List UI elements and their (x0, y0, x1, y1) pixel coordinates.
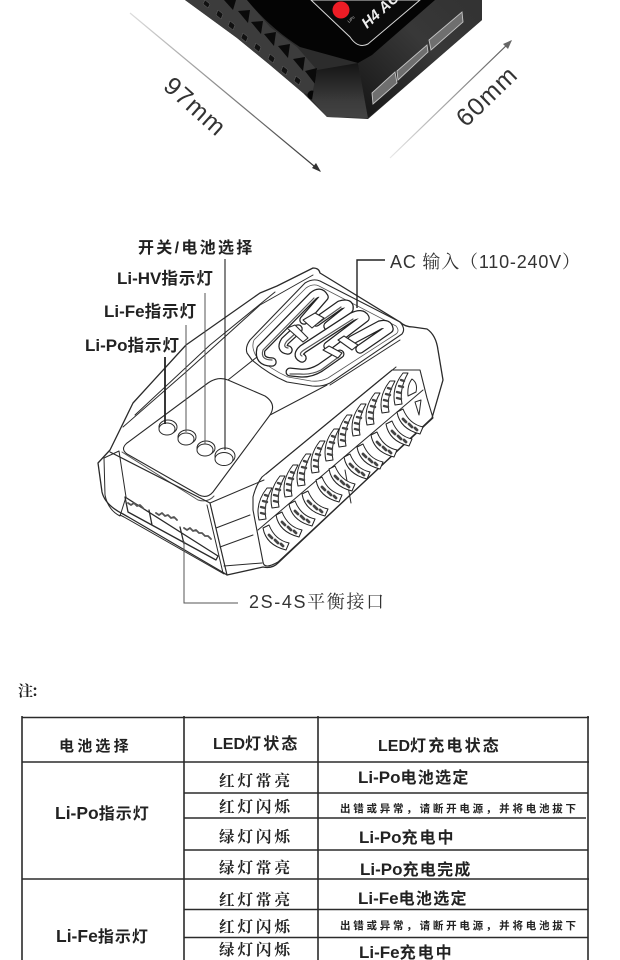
leader lines (165, 259, 385, 603)
side ports (372, 12, 463, 104)
AC slot 3 (299, 315, 365, 358)
vent panel (253, 370, 433, 566)
row group: Li-Fe (56, 889, 576, 960)
dimension: 60mm (390, 40, 523, 158)
AC panel (246, 280, 404, 386)
dimension: 97mm: 97mm (158, 72, 231, 141)
row group: Li-Fe: 出错或异常，请断开电源，并将电池拔下 (340, 919, 576, 932)
callout: Li-Po: Li-Po指示灯 (85, 336, 180, 355)
glossy corner (312, 63, 368, 118)
header row: 电池选择 (59, 737, 132, 755)
row group: Li-Fe: 红灯闪烁 (219, 917, 291, 936)
dimension: 97mm (130, 13, 321, 172)
header row: LED灯充电状态 (378, 736, 501, 755)
dimension: 60mm: 60mm (451, 61, 523, 132)
raised blocks (287, 313, 358, 358)
AC slot 2 (283, 304, 349, 350)
row group: Li-Po: 绿灯闪烁 (219, 827, 291, 846)
AC slot 4 (290, 324, 389, 374)
note heading: 注： (18, 682, 46, 700)
table grid (22, 716, 589, 960)
header row: LED灯状态 (213, 734, 300, 753)
lower vent row (263, 400, 423, 550)
control panel (311, 0, 420, 45)
black top shoulder (247, 0, 435, 63)
row group: Li-Fe: 红灯常亮 (219, 890, 290, 909)
charger body (185, 0, 482, 119)
callout: balance port: 2S-4S平衡接口 (249, 592, 384, 612)
red LED (332, 2, 350, 18)
LED label: LiPo (346, 14, 356, 24)
button panel (124, 379, 273, 496)
row group: Li-Po: 红灯闪烁 (219, 797, 291, 816)
row group: Li-Fe: Li-Fe指示灯 (56, 926, 149, 946)
status table (22, 716, 589, 960)
row group: Li-Po: Li-Po指示灯 (55, 803, 150, 823)
row group: Li-Po (55, 768, 576, 879)
row group: Li-Fe: Li-Fe电池选定 (358, 889, 468, 908)
balance ports (125, 497, 218, 560)
header row (59, 734, 501, 755)
line drawing of charger (98, 268, 443, 575)
row group: Li-Po: Li-Po充电完成 (360, 860, 472, 879)
callout: Li-HV: Li-HV指示灯 (117, 269, 214, 288)
product photo: black charger (185, 0, 482, 119)
callout: power switch: 开关/电池选择 (138, 238, 255, 257)
row group: Li-Po: 绿灯常亮 (219, 858, 290, 877)
row group: Li-Po: Li-Po充电中 (359, 828, 456, 847)
row group: Li-Po: 出错或异常，请断开电源，并将电池拔下 (340, 802, 576, 815)
row group: Li-Fe: 绿灯闪烁 (219, 940, 291, 959)
row group: Li-Po: 红灯常亮 (219, 771, 290, 790)
row group: Li-Po: Li-Po电池选定 (358, 768, 470, 787)
vent squares (203, 0, 301, 85)
vent recess dark band (185, 0, 317, 95)
upper inner lines (123, 275, 313, 427)
callout: AC input: AC 输入（110-240V） (390, 252, 580, 272)
outer contour (98, 268, 443, 575)
side face (358, 0, 482, 118)
vent triangles (224, 0, 317, 84)
callout: Li-Fe: Li-Fe指示灯 (104, 302, 197, 321)
buttons (159, 420, 235, 466)
AC slot 1 (260, 293, 324, 362)
front face (110, 452, 227, 575)
upper vent row (258, 373, 416, 520)
